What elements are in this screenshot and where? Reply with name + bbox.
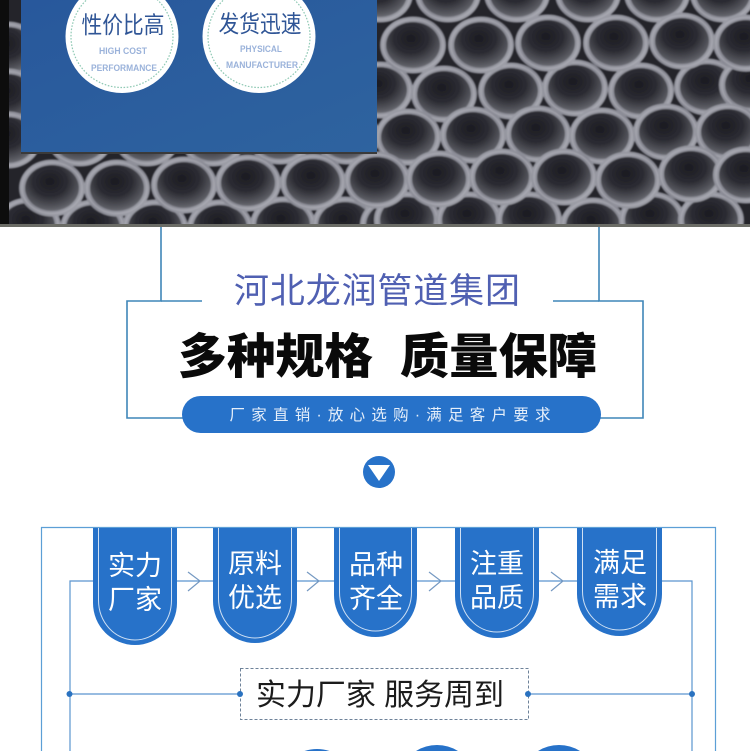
bottom icons (cropped) [304, 745, 580, 751]
badge: high cost performance: HIGH COST [99, 46, 147, 57]
badge: fast delivery: MANUFACTURER [226, 60, 298, 71]
banner: subtitle pill [182, 396, 601, 433]
step 2: 原料 [228, 549, 282, 579]
heading frame [127, 227, 643, 418]
icon: down arrow [363, 456, 395, 488]
step 5: 需求 [593, 582, 647, 612]
step 4: 注重 [470, 549, 524, 579]
heading: company name: 河北龙润管道集团 [234, 272, 520, 311]
step 5 [577, 528, 662, 636]
badge: fast delivery: PHYSICAL [240, 44, 282, 55]
step 2 [213, 528, 297, 643]
step 3 [334, 528, 417, 637]
step 1: 厂家 [108, 585, 162, 615]
connector dots [66, 691, 695, 697]
heading: main title [178, 331, 597, 384]
step 2: 优选 [228, 583, 282, 613]
service label box [240, 668, 528, 720]
title right part: 质量保障 [400, 331, 597, 384]
arrows between steps [188, 572, 563, 591]
badge: high cost performance [66, 0, 178, 93]
step 1 [93, 528, 177, 645]
connector lines [70, 581, 692, 751]
panel: blue overlay [21, 0, 377, 154]
badge: fast delivery: 发货迅速 [218, 11, 302, 37]
service label box: 实力厂家 服务周到 [256, 679, 504, 712]
step 4 [455, 528, 539, 638]
badge: high cost performance: 性价比高 [82, 12, 164, 38]
photo bottom edge [0, 224, 750, 227]
step 4: 品质 [470, 583, 524, 613]
step 3: 品种 [349, 550, 403, 580]
panel: process box [42, 528, 716, 751]
step 5: 满足 [593, 548, 647, 578]
photo: stacked pipes [0, 0, 750, 224]
badge: fast delivery [202, 0, 316, 93]
badge: high cost performance: PERFORMANCE [91, 63, 157, 74]
title left part: 多种规格 [178, 331, 373, 384]
step 1: 实力 [108, 551, 162, 581]
banner: subtitle pill: 厂家直销·放心选购·满足客户要求 [230, 406, 550, 424]
step 3: 齐全 [349, 584, 403, 614]
